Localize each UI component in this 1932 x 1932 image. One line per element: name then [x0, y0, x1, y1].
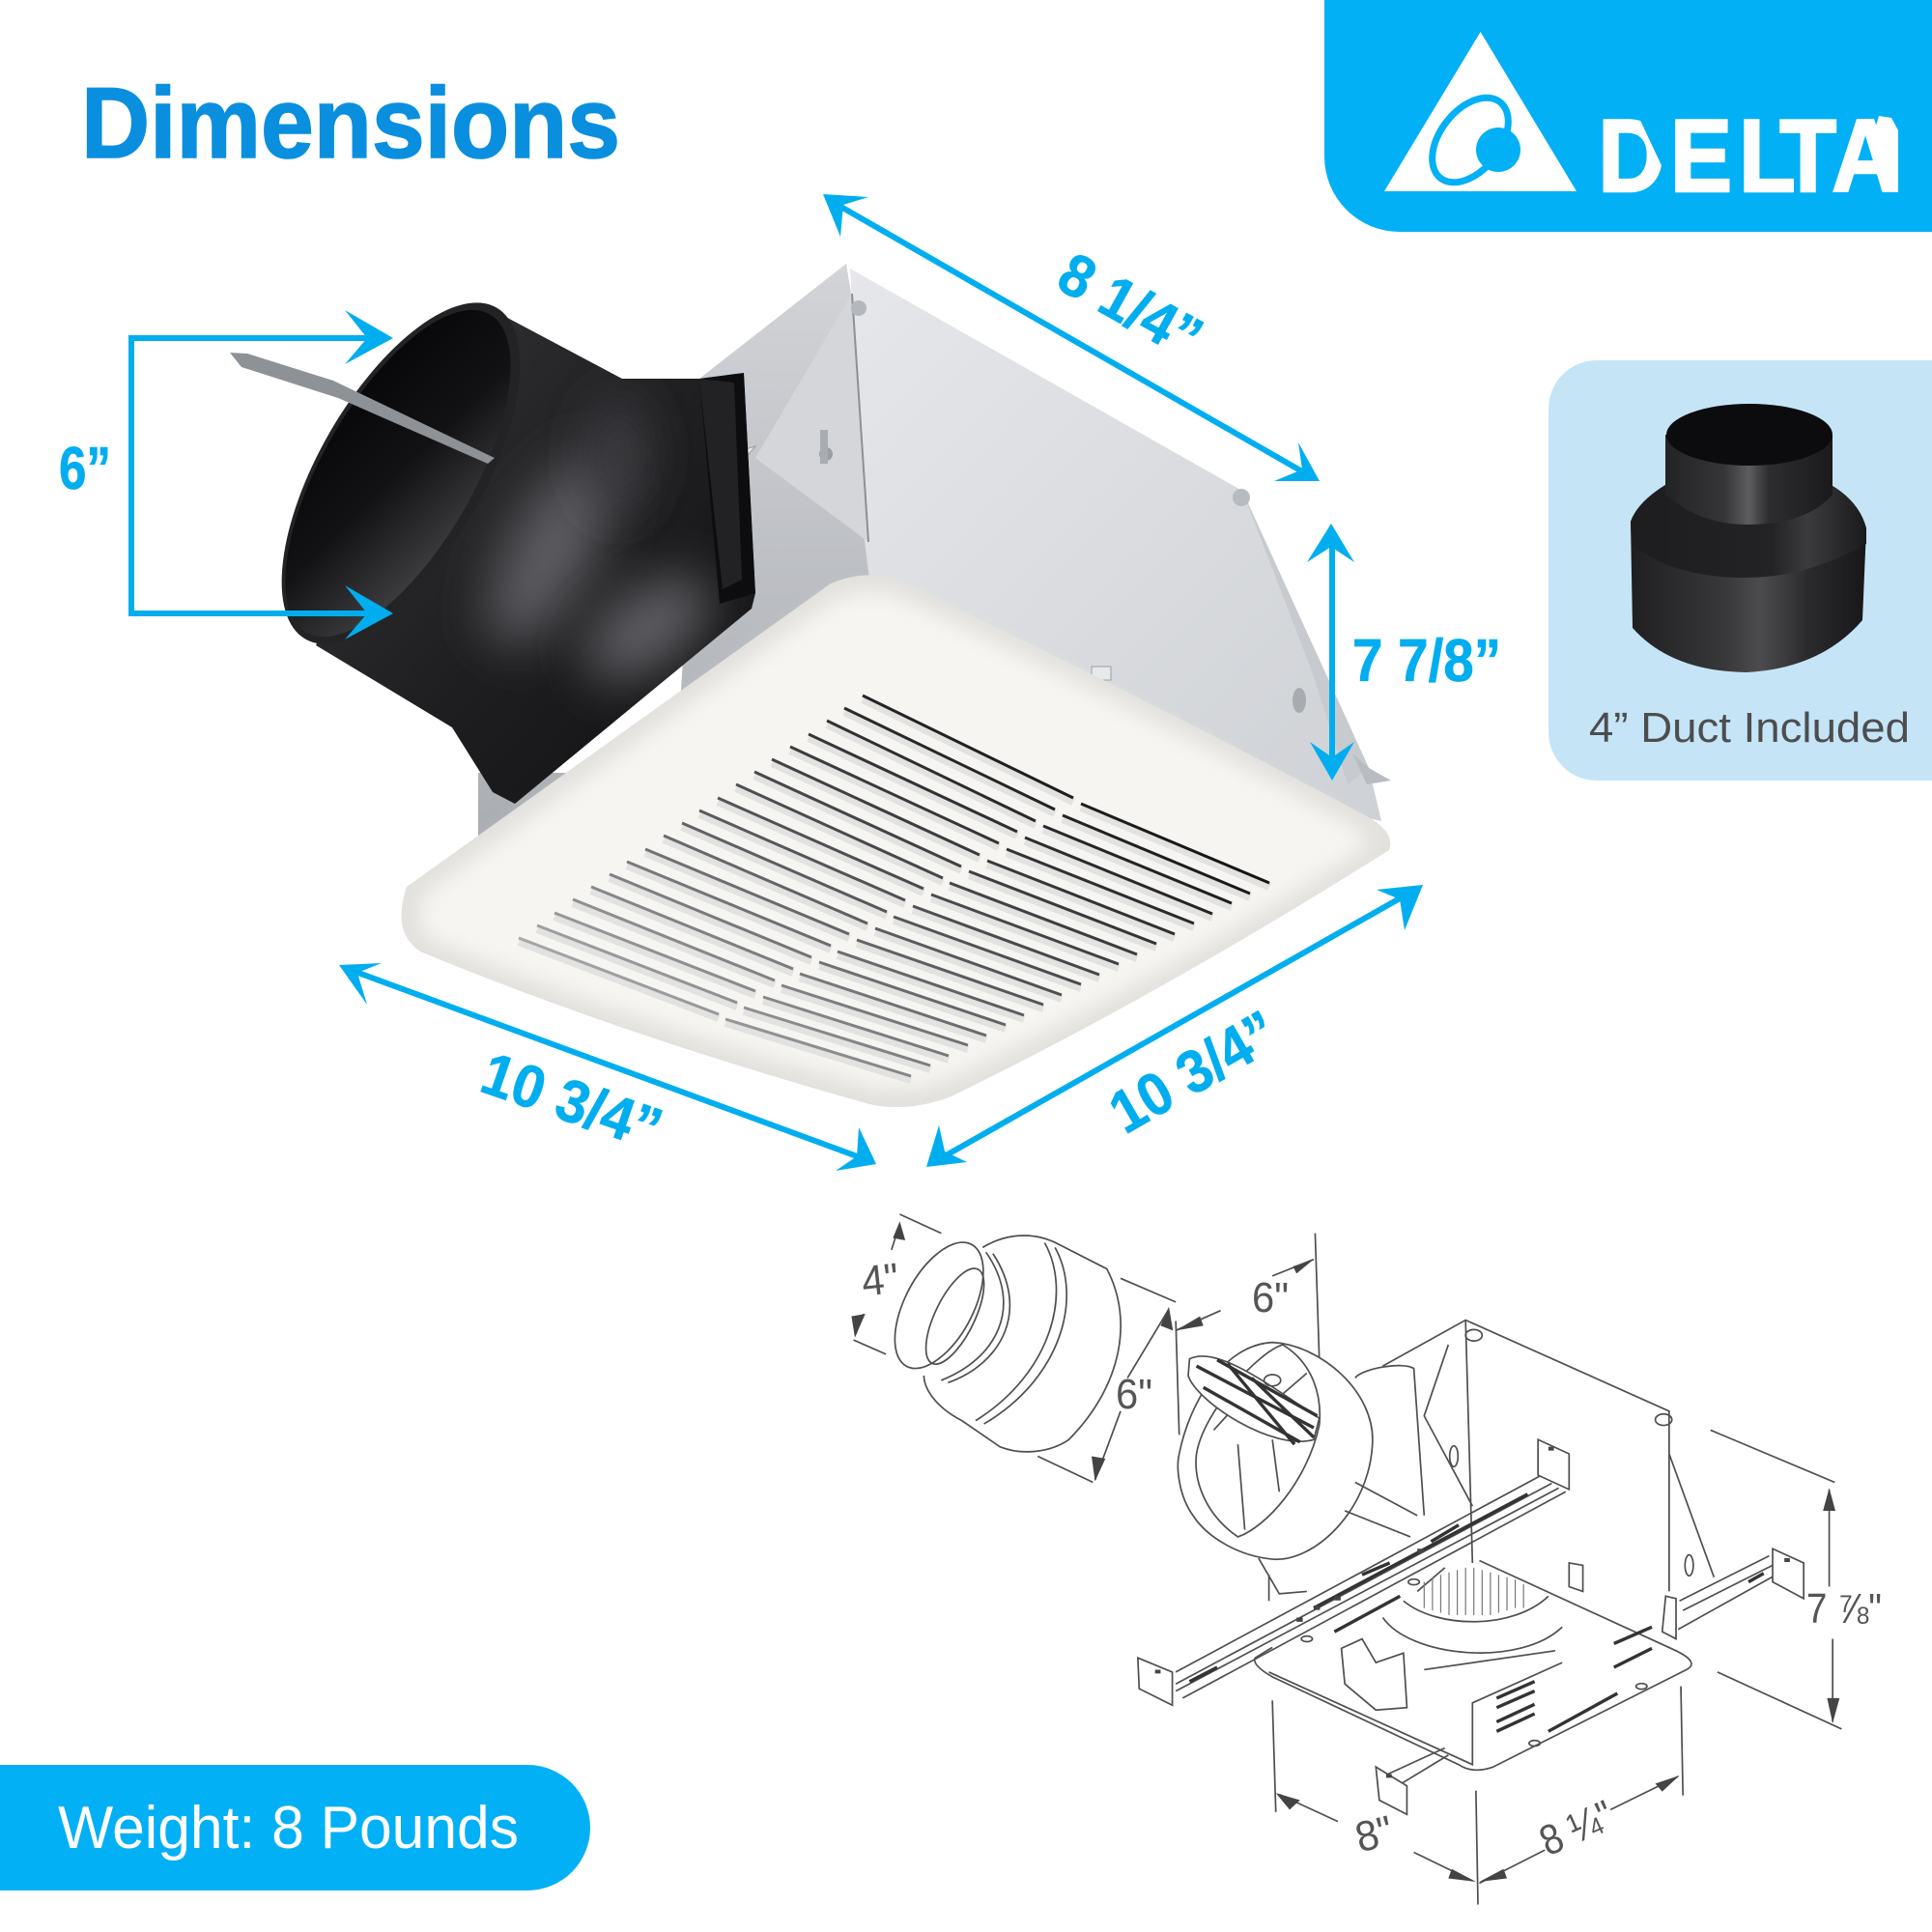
label: 8 1/4: 8 ¼" — [1533, 1792, 1621, 1865]
dimension: 10 3/4 left arrow: 10 3/4” — [473, 1040, 670, 1163]
bottom plate — [1255, 1561, 1691, 1770]
fan collar and damper — [1178, 1343, 1373, 1559]
logo wordmark: DELTA — [1598, 98, 1899, 213]
housing box — [1269, 1321, 1714, 1601]
grille — [401, 575, 1390, 1107]
icon: delta triangle logo — [1384, 32, 1577, 196]
technical line drawing — [851, 1214, 1882, 1905]
dimension lines — [854, 1214, 1320, 1482]
label: 8 inch: 8" — [1350, 1807, 1398, 1861]
exploded fan line art — [851, 1214, 1841, 1905]
logo banner — [1324, 0, 1932, 232]
weight pill: Weight: 8 Pounds — [58, 1795, 519, 1861]
rails — [1176, 1475, 1776, 1791]
dimension: 8 1/4 top arrow — [823, 194, 1320, 481]
duct adapter photo — [1631, 404, 1866, 672]
damper blade — [230, 353, 495, 464]
grille slats — [519, 696, 1269, 1076]
reducer — [923, 1236, 1121, 1452]
grille slat shading — [519, 699, 1269, 1080]
blower — [1382, 1568, 1562, 1669]
label: 7 7/8: 7 ⅞" — [1806, 1585, 1882, 1633]
dimension: 8 1/4 top arrow: 8 1/4” — [1047, 241, 1213, 373]
black duct collar — [282, 302, 755, 804]
panel: duct included — [1548, 360, 1932, 781]
metal housing — [478, 264, 1391, 850]
label: 4 inch: 4" — [860, 1255, 901, 1306]
duct caption: 4” Duct Included — [1589, 704, 1910, 752]
dimension: 10 3/4 left arrow — [339, 963, 876, 1171]
dimension: 10 3/4 right arrow — [926, 885, 1423, 1167]
weight pill — [0, 1765, 590, 1890]
label: 6 inch collar: 6" — [1252, 1274, 1289, 1321]
fan product photo — [230, 264, 1391, 1107]
dimension: 6 inch duct bracket: 6” — [59, 436, 111, 502]
dimension: 7 7/8 height arrow — [1307, 524, 1501, 781]
label: 6 inch reducer: 6" — [1116, 1371, 1152, 1418]
dimension: 7 7/8 height arrow: 7 7/8” — [1352, 628, 1501, 695]
dimension: 10 3/4 right arrow: 10 3/4” — [1098, 998, 1289, 1147]
title: Dimensions — [81, 68, 620, 180]
dimension: 6 inch duct bracket — [59, 310, 393, 639]
